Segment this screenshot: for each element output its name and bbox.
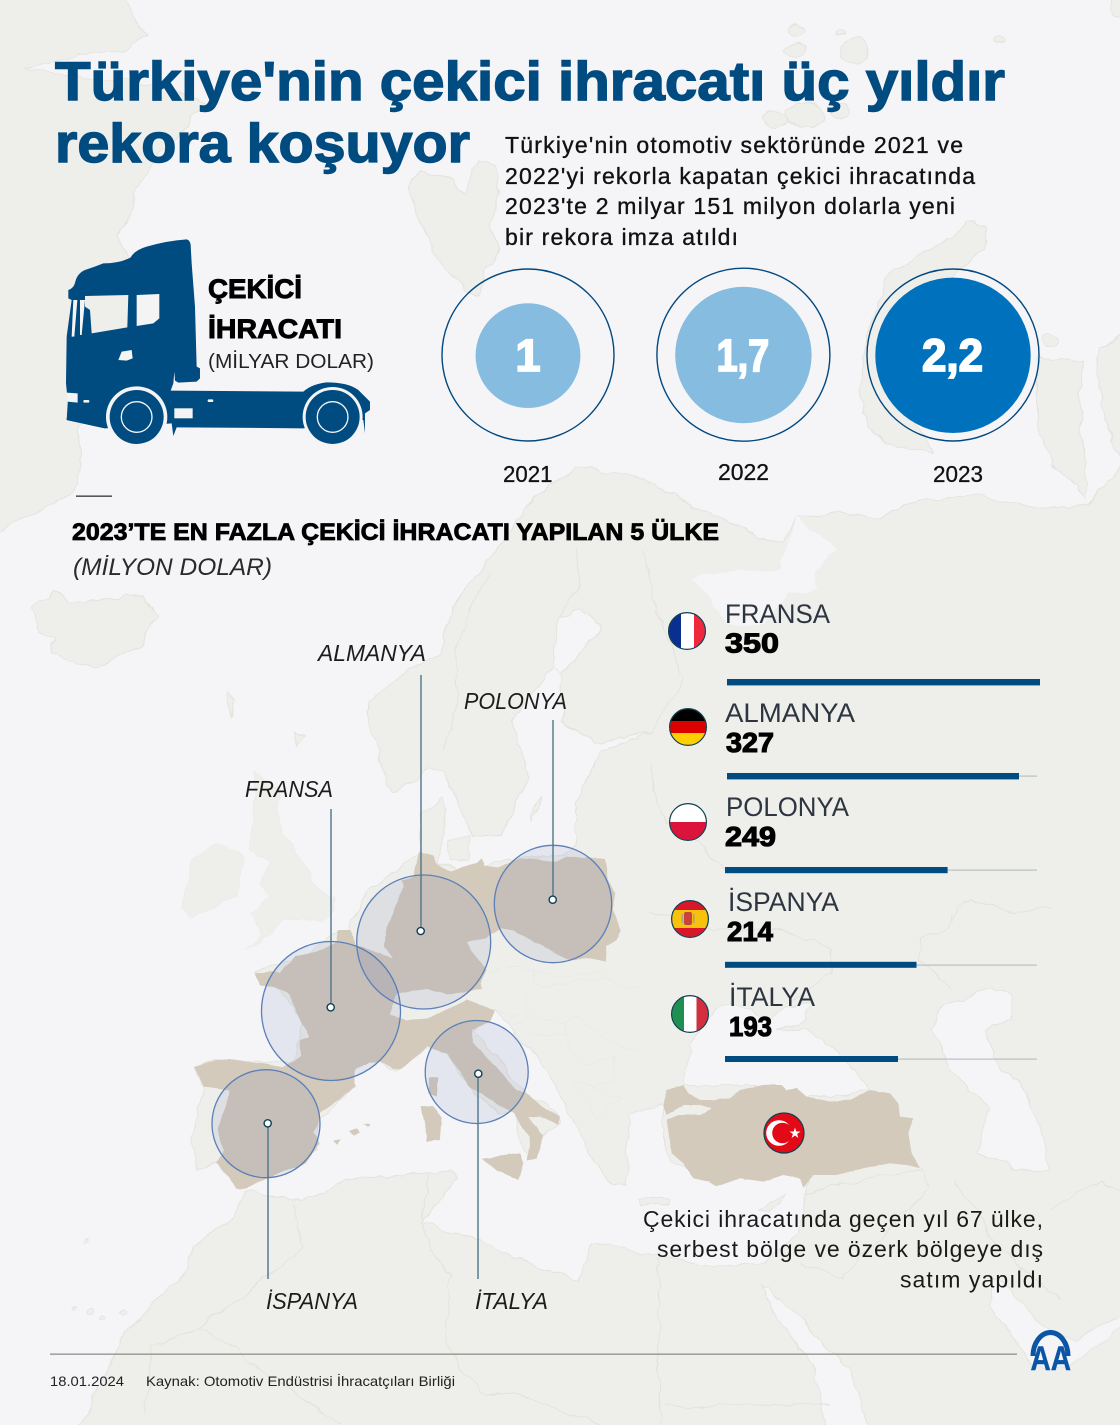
intro text: Türkiye'nin otomotiv sektöründe 2021 ve [505,132,963,158]
heading: truck exports: ÇEKİCİ [208,274,302,304]
circle: Spain [212,1070,320,1178]
ranking: Italy [672,981,1037,1062]
intro text [505,132,975,250]
section heading [72,496,719,581]
heading: truck exports: (MİLYAR DOLAR) [208,350,374,373]
text: export note: Çekici ihracatında geçen yıl 67 ülke, [643,1206,1043,1232]
land: Iceland [33,592,156,667]
label: İspanya: İSPANYA [266,1288,358,1314]
flag: Germany [670,709,706,745]
title [55,50,1005,174]
intro text: 2023'te 2 milyar 151 milyon dolarla yeni [505,193,955,219]
text: export note [643,1206,1043,1292]
intro text: bir rekora imza atıldı [505,224,738,250]
circle: France [262,942,400,1080]
section heading: (MİLYON DOLAR) [73,554,272,581]
heading: truck exports [208,274,374,373]
bubble: 2022 [657,268,830,485]
land: Arctic islands [761,0,1120,347]
label: Polonya: POLONYA [464,688,567,714]
bubble: 2023: 2,2 [922,330,983,381]
flag: Spain [672,901,708,937]
ranking: Spain [672,886,1037,968]
land: Novaya Zemlya [860,222,985,455]
circle: Italy [425,1020,528,1124]
ranking: Poland: POLONYA [726,792,849,822]
France, Germany, Poland, Spain and Italy landmass [195,853,621,1188]
label: Almanya: ALMANYA [316,640,426,666]
map: Türkiye [663,1085,920,1188]
highlighted countries on the map [195,853,621,1188]
ranking: Germany [670,698,1037,779]
logo: AA: AA [1030,1340,1071,1378]
ranking: France: FRANSA [725,599,830,629]
land: Eurasia and Africa [74,452,1120,1425]
intro text: 2022'yi rekorla kapatan çekici ihracatında [505,163,975,189]
bubble: 2022: 1,7 [717,330,769,381]
bubble: 2022: 2022 [718,459,769,485]
ranking: France [669,599,1040,685]
bubble: 2021: 1 [515,330,541,381]
bubble: 2023 [867,269,1039,487]
text: export note: satım yapıldı [900,1266,1043,1292]
label: İtalya: İTALYA [475,1288,548,1314]
bubble: 2021 [442,269,614,487]
ranking: France: 350 [725,628,779,658]
title: rekora koşuyor [55,112,470,174]
ranking: Germany: ALMANYA [725,698,855,728]
bubble: 2021: 2021 [503,461,552,487]
ranking: Poland [670,792,1037,873]
ranking: Germany: 327 [726,727,774,758]
ranking: Spain: İSPANYA [728,886,839,917]
land: Mediterranean islands [73,693,786,1320]
ranking: Spain: 214 [727,916,773,947]
footer [50,1354,1017,1389]
circle: Poland [494,845,612,963]
land: northern Russia peninsula [1037,356,1087,498]
flag: Poland [670,804,706,840]
footer: Kaynak: Otomotiv Endüstrisi İhracatçıları Birliği [146,1372,455,1389]
map circles [212,845,612,1178]
ranking: Poland: 249 [725,821,776,852]
ranking: Italy: İTALYA [729,981,815,1012]
flag: France [669,613,706,649]
title: Türkiye'nin çekici ihracatı üç yıldır [55,50,1005,112]
seas: Black Sea, Caspian, Red Sea, Gulf, White Sea [553,518,1120,1425]
flag: Türkiye [764,1113,804,1153]
text: export note: serbest bölge ve özerk bölgeye dış [657,1236,1043,1262]
section heading: 2023’TE EN FAZLA ÇEKİCİ İHRACATI YAPILAN 5 ÜLKE [72,519,719,546]
icon: truck [66,239,370,448]
Sardinia, Corsica, Sicily, Balearics [334,1077,523,1180]
ranking: Italy: 193 [729,1011,772,1042]
footer: 18.01.2024 [50,1373,124,1389]
flag: Italy [672,996,708,1032]
borders [146,547,1120,1425]
land: British Isles [182,773,337,950]
bubble: 2023: 2023 [933,461,983,487]
label: Fransa: FRANSA [245,776,333,802]
map leader lines and labels [245,640,567,1314]
land: Svalbard islands [407,160,500,297]
land: Greenland [0,0,205,540]
circle: Germany [357,875,491,1009]
heading: truck exports: İHRACATI [208,314,342,344]
